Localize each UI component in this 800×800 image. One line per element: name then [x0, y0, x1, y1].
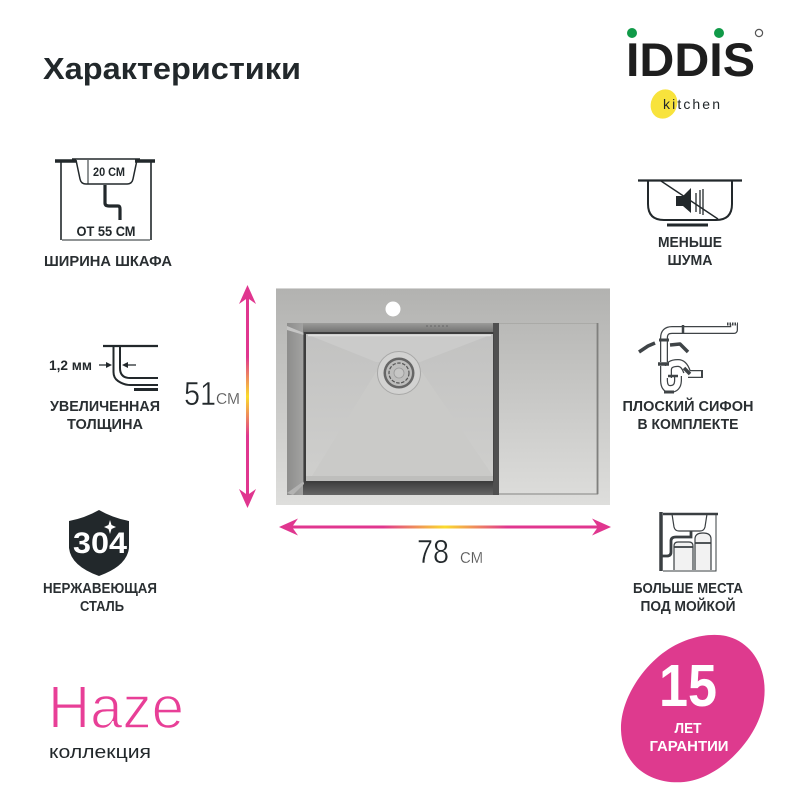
icon: wall section: [99, 346, 158, 390]
feature: more space under sink: ПОД МОЙКОЙ: [640, 597, 736, 615]
icon: muted sink: [638, 180, 742, 225]
icon: siphon: [639, 324, 738, 392]
dimension: 78 cm: [417, 533, 483, 570]
bowl floor: [306, 334, 493, 481]
tap hole: [386, 302, 400, 316]
feature: flat siphon: [622, 324, 754, 433]
feature: cabinet width: 20 СМ: [93, 167, 125, 179]
dimension: 51 cm: [184, 375, 240, 412]
feature: less noise: [638, 180, 742, 269]
warranty badge: [621, 635, 765, 782]
icon: cabinet with sink: [55, 159, 155, 240]
sink plate: [276, 288, 610, 505]
logo: IDDIS kitchen: [626, 28, 763, 123]
feature: cabinet width: [44, 159, 173, 270]
dimension: 78 cm: 78: [417, 533, 449, 570]
feature: stainless steel 304: СТАЛЬ: [80, 599, 124, 615]
icon: shield 304: [69, 510, 129, 576]
feature: increased thickness: [49, 346, 160, 433]
label: flat siphon: ПЛОСКИЙ СИФОН: [622, 397, 754, 415]
label: increased thickness: УВЕЛИЧЕННАЯ: [50, 399, 160, 415]
warranty badge: 15: [659, 653, 717, 719]
label: more space: БОЛЬШЕ МЕСТА: [633, 581, 743, 597]
collection name: Haze: [48, 674, 184, 741]
warranty badge: ГАРАНТИИ: [650, 738, 728, 755]
warranty badge: ЛЕТ: [674, 720, 702, 737]
feature: flat siphon: В КОМПЛЕКТЕ: [638, 417, 739, 433]
feature: more space under sink: [633, 512, 743, 615]
bowl: [287, 323, 499, 495]
label: less noise: МЕНЬШЕ: [658, 235, 722, 251]
collection caption: коллекция: [49, 742, 151, 762]
logo: IDDIS kitchen: IDDIS: [626, 33, 755, 86]
dimension: 51 cm: СМ: [216, 391, 240, 408]
sink top view: [276, 288, 610, 505]
logo: IDDIS kitchen: kitchen: [663, 96, 720, 112]
feature: less noise: ШУМА: [668, 253, 713, 269]
icon: cabinet with bins: [660, 512, 718, 571]
feature: increased thickness: 1,2 мм: [49, 358, 92, 373]
label: stainless steel: НЕРЖАВЕЮЩАЯ: [43, 581, 157, 597]
label: cabinet width: ШИРИНА ШКАФА: [44, 254, 173, 270]
dimension: 51 cm: 51: [184, 375, 216, 412]
drain: [378, 352, 420, 394]
dimension: 78 cm: СМ: [460, 550, 483, 567]
arrow: width: [279, 518, 611, 536]
feature: stainless steel 304: 304: [73, 527, 127, 560]
drainer: [499, 323, 598, 494]
feature: cabinet width: ОТ 55 СМ: [76, 224, 136, 239]
title: Характеристики: [43, 51, 301, 86]
feature: increased thickness: ТОЛЩИНА: [67, 417, 144, 433]
feature: stainless steel 304: [43, 510, 157, 615]
arrow: height: [239, 285, 256, 508]
